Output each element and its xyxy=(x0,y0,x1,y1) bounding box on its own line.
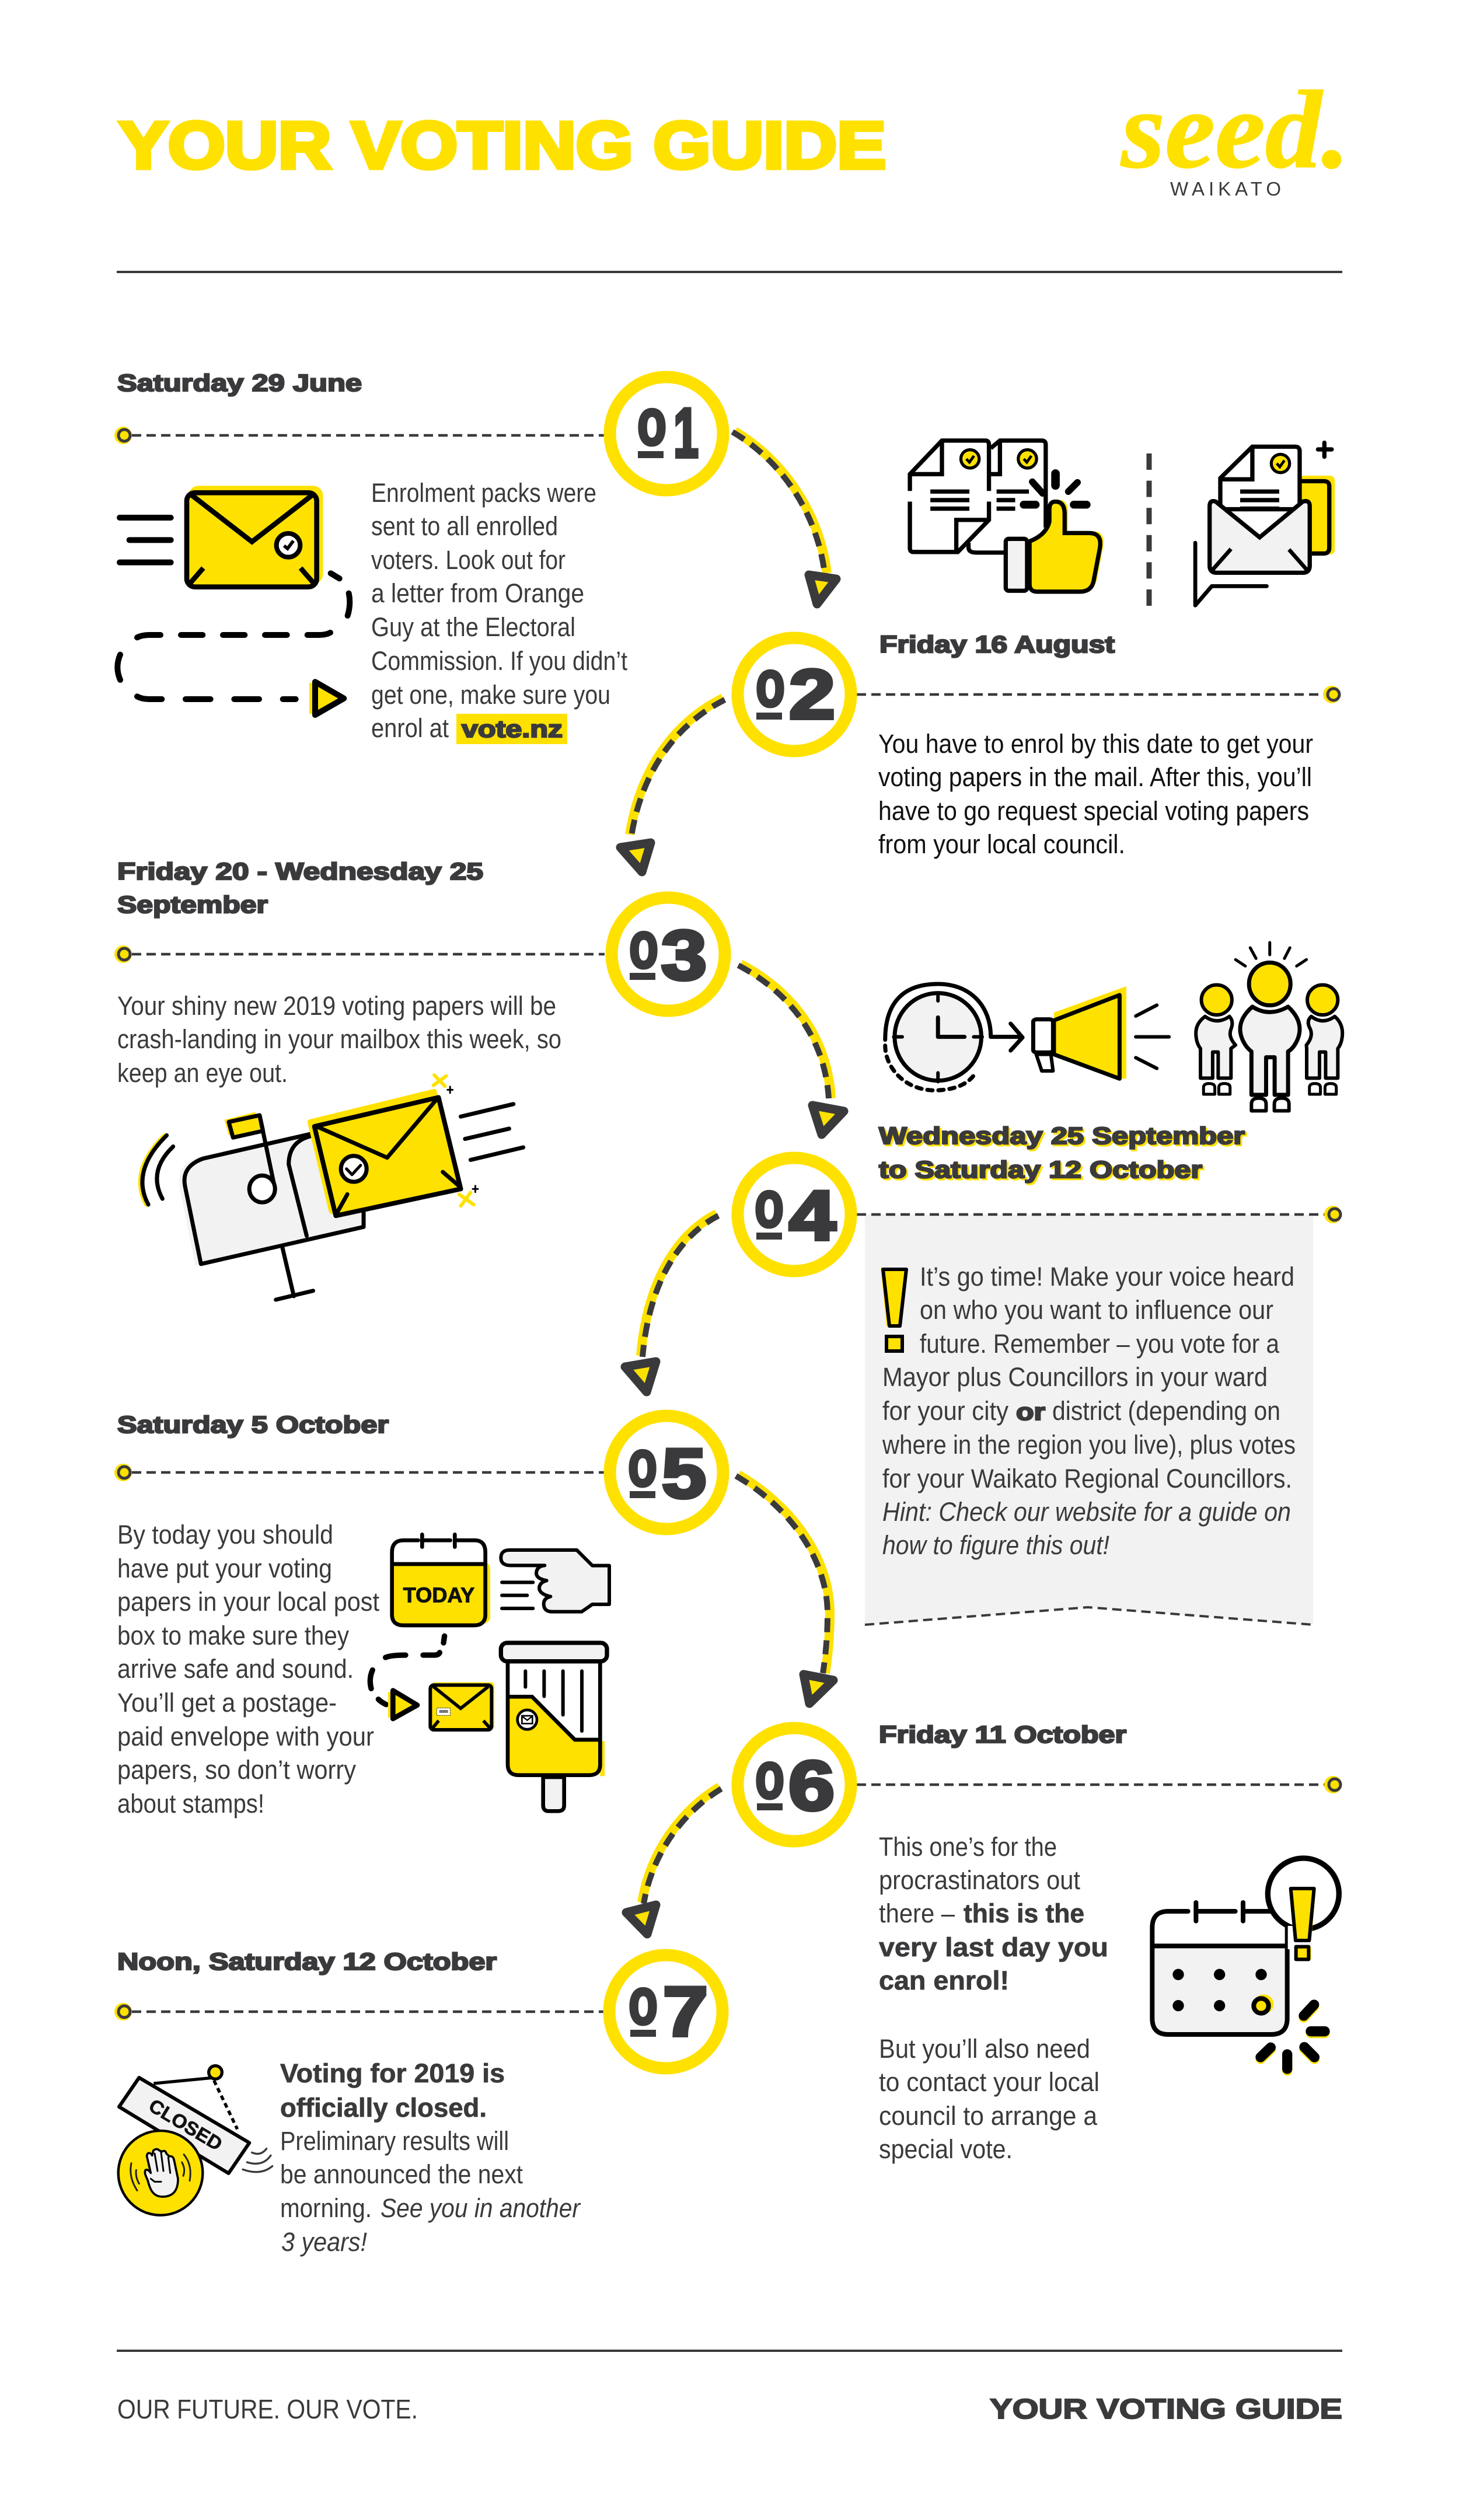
step 1 number badge: 1 xyxy=(673,394,699,472)
step 7 body text xyxy=(280,2058,581,2257)
step 3 number badge: o xyxy=(629,909,658,982)
step 4 date: to Saturday 12 October xyxy=(879,1156,1202,1183)
arrow: step 1 to step 2 xyxy=(732,431,836,604)
step 7 body text: Preliminary results will xyxy=(280,2126,509,2156)
panel: step 3 xyxy=(114,858,725,1300)
step 5 number badge: 5 xyxy=(662,1434,706,1513)
step 5 body text: By today you should xyxy=(117,1520,333,1549)
step 1 body text: get one, make sure you xyxy=(371,680,610,710)
icon: calendar with exclamation xyxy=(1152,1858,1339,2071)
step 4 connector xyxy=(857,1206,1342,1223)
icon: voting papers in envelope xyxy=(1195,443,1335,605)
step 6 body text: this is the xyxy=(964,1898,1084,1928)
step 6 connector xyxy=(857,1776,1342,1793)
footer title: YOUR VOTING GUIDE xyxy=(990,2394,1342,2425)
step 6 number badge: o xyxy=(755,1739,784,1812)
panel: step 5 xyxy=(114,1411,723,1819)
step 6 number badge: 6 xyxy=(788,1747,835,1825)
arrow: step 4 to step 5 xyxy=(625,1214,718,1392)
arrow: step 3 to step 4 xyxy=(738,964,844,1135)
step 7 number badge xyxy=(609,1955,722,2068)
step 2 body text: have to go request special voting papers xyxy=(878,796,1309,826)
step 5 date: Saturday 5 October xyxy=(117,1411,389,1438)
step 4 body text: It’s go time! Make your voice heard xyxy=(920,1262,1294,1292)
step 3 body text: Your shiny new 2019 voting papers will be xyxy=(117,991,556,1021)
step 2 body text: from your local council. xyxy=(878,829,1125,859)
step 1 body text: sent to all enrolled xyxy=(371,511,558,541)
step 5 body text: about stamps! xyxy=(117,1789,264,1819)
callout panel background xyxy=(865,1214,1313,1625)
icon: closed sign and hand xyxy=(118,2065,273,2215)
step 4 body text: where in the region you live), plus votes xyxy=(882,1430,1296,1460)
link highlight: vote.nz xyxy=(456,714,567,744)
step 5 body text: have put your voting xyxy=(117,1554,332,1583)
step 6 body text: This one’s for the xyxy=(879,1832,1057,1862)
arrow: step 2 to step 3 xyxy=(620,698,725,872)
step 1 number badge: o xyxy=(637,386,666,459)
title: YOUR VOTING GUIDE xyxy=(119,109,886,182)
step 7 date: Noon, Saturday 12 October xyxy=(117,1948,497,1975)
step 5 number badge: o xyxy=(628,1427,657,1500)
logo: seed Waikato: WAIKATO xyxy=(1170,178,1281,200)
panel: step 2 xyxy=(738,631,1341,859)
step 1 body text: enrol at xyxy=(371,713,449,743)
step 4 body text: district (depending on xyxy=(1052,1396,1280,1426)
step 2 number badge xyxy=(738,638,851,751)
step 5 body text: papers, so don’t worry xyxy=(117,1755,356,1785)
step 4 body text: on who you want to influence our xyxy=(920,1295,1273,1325)
panel: step 1 xyxy=(114,369,723,744)
step 4 number badge: o xyxy=(755,1168,784,1241)
step 6 body text: can enrol! xyxy=(879,1966,1009,1995)
arrow: step 5 to step 6 xyxy=(736,1475,833,1704)
step 7 connector xyxy=(114,2003,605,2020)
step 7 body text: Voting for 2019 is xyxy=(280,2058,505,2088)
icon: documents and thumbs up xyxy=(910,441,1104,592)
step 3 body text xyxy=(117,991,561,1088)
step 6 body text: council to arrange a xyxy=(879,2101,1098,2131)
step 2 body text: voting papers in the mail. After this, you’ll xyxy=(878,762,1312,792)
link highlight: vote.nz: vote.nz xyxy=(462,715,563,742)
step 6 body text: special vote. xyxy=(879,2134,1013,2164)
step 5 body text: paid envelope with your xyxy=(117,1722,374,1751)
step 7 number badge: 7 xyxy=(663,1973,708,2051)
step 6 body text: there – xyxy=(879,1898,955,1928)
step 7 body text: morning. xyxy=(280,2193,372,2223)
step 3 date xyxy=(117,858,483,918)
footer tagline: OUR FUTURE. OUR VOTE. xyxy=(117,2394,418,2424)
step 2 body text: You have to enrol by this date to get your xyxy=(878,729,1313,759)
step 2 number badge: o xyxy=(756,647,785,720)
step 2 connector xyxy=(857,686,1341,703)
icon: exclamation mark xyxy=(881,1268,906,1351)
step 1 number badge xyxy=(610,377,723,490)
step 4 body text: how to figure this out! xyxy=(882,1530,1109,1560)
step 3 body text: crash-landing in your mailbox this week, so xyxy=(117,1024,561,1054)
step 3 number badge: 3 xyxy=(661,916,707,994)
step 1 body text: Enrolment packs were xyxy=(371,478,596,508)
step 4 body text: future. Remember – you vote for a xyxy=(920,1329,1280,1359)
step 6 body text: procrastinators out xyxy=(879,1865,1080,1895)
divider: dashed vertical xyxy=(1146,453,1152,606)
step 2 body text xyxy=(878,729,1313,859)
step 1 body text: voters. Look out for xyxy=(371,545,566,575)
panel: step 6 xyxy=(738,1721,1342,2164)
step 4 body text xyxy=(882,1262,1296,1560)
step 3 date: Friday 20 - Wednesday 25 xyxy=(117,858,483,885)
step 7 body text: 3 years! xyxy=(281,2227,367,2257)
icon: today calendar, pointing hand, envelope and post box xyxy=(370,1534,609,1811)
step 4 body text: for your city xyxy=(882,1396,1008,1426)
step 4 number badge xyxy=(738,1158,851,1271)
step 6 body text: very last day you xyxy=(879,1932,1108,1962)
icon: closed sign and hand: CLOSED xyxy=(145,2095,226,2155)
step 4 body text: Mayor plus Councillors in your ward xyxy=(882,1362,1268,1392)
step 1 connector xyxy=(114,427,605,444)
step 4 date: Wednesday 25 September xyxy=(879,1122,1245,1149)
step 5 body text: You’ll get a postage- xyxy=(117,1688,337,1718)
step 5 body text: arrive safe and sound. xyxy=(117,1654,354,1684)
panel: step 4 xyxy=(738,1122,1342,1625)
icon: today calendar, pointing hand, envelope and post box: TODAY xyxy=(403,1583,474,1607)
arrow: step 6 to step 7 xyxy=(626,1787,721,1934)
step 7 body text: See you in another xyxy=(381,2193,581,2223)
panel: step 7 xyxy=(114,1948,722,2257)
step 4 body text: Hint: Check our website for a guide on xyxy=(882,1497,1291,1527)
step 1 body text: Commission. If you didn’t xyxy=(371,646,627,676)
step 1 body text: Guy at the Electoral xyxy=(371,612,575,642)
icon: envelope with dashed route xyxy=(117,486,350,715)
step 5 number badge xyxy=(610,1416,723,1529)
step 4 body text: for your Waikato Regional Councillors. xyxy=(882,1464,1292,1493)
step 5 body text xyxy=(117,1520,379,1819)
icon: clock, megaphone and people xyxy=(885,943,1342,1111)
step 6 body text: to contact your local xyxy=(879,2067,1100,2097)
step 2 date: Friday 16 August xyxy=(879,631,1115,658)
icon: mailbox and flying envelope xyxy=(140,1075,523,1300)
step 5 body text: box to make sure they xyxy=(117,1621,349,1650)
step 1 body text xyxy=(371,478,627,744)
step 2 number badge: 2 xyxy=(789,655,835,734)
step 4 body text: or xyxy=(1016,1398,1045,1425)
step 6 body text: But you’ll also need xyxy=(879,2034,1090,2064)
step 7 body text: be announced the next xyxy=(280,2159,523,2189)
step 3 number badge xyxy=(612,898,725,1011)
step 3 body text: keep an eye out. xyxy=(117,1058,288,1088)
step 3 date: September xyxy=(117,891,268,918)
step 3 connector xyxy=(114,945,605,963)
step 4 date xyxy=(879,1122,1245,1183)
step 5 connector xyxy=(114,1464,605,1481)
logo: seed Waikato: seed. xyxy=(1120,69,1350,191)
step 1 body text: a letter from Orange xyxy=(371,578,584,608)
step 4 number badge: 4 xyxy=(789,1177,836,1255)
step 7 body text: officially closed. xyxy=(280,2093,487,2123)
step 5 body text: papers in your local post xyxy=(117,1587,379,1617)
step 6 body text xyxy=(879,1832,1108,2164)
step 6 number badge xyxy=(738,1728,851,1841)
step 1 date: Saturday 29 June xyxy=(117,369,362,396)
step 7 number badge: o xyxy=(629,1965,658,2038)
step 6 date: Friday 11 October xyxy=(879,1721,1126,1748)
